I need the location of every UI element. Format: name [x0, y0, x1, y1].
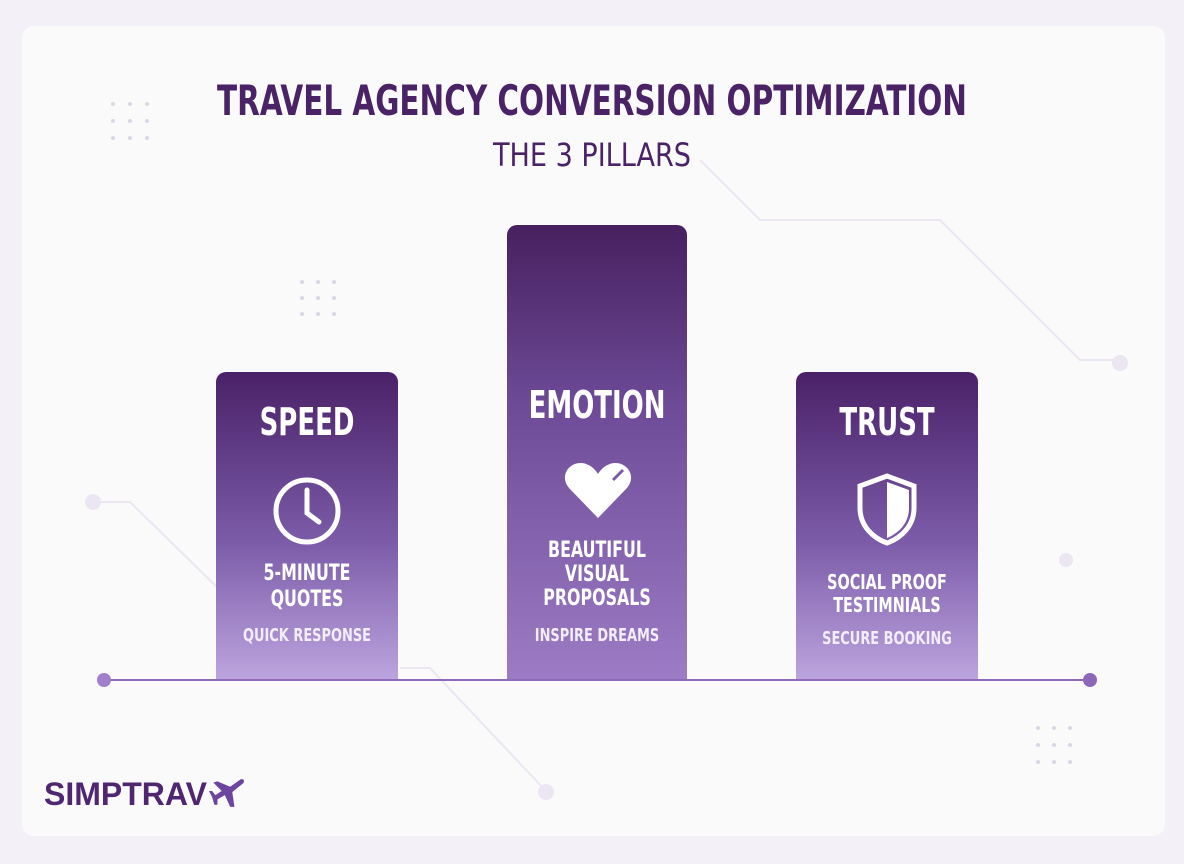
text: social proof testimnials: SOCIAL PROOF — [827, 570, 947, 594]
text: inspire dreams: INSPIRE DREAMS — [535, 625, 659, 646]
icon: clock — [274, 478, 340, 544]
panel: emotion — [507, 225, 687, 679]
heading: speed: SPEED — [260, 400, 354, 444]
text: quick response: QUICK RESPONSE — [243, 625, 371, 646]
text: 5-minute quotes: 5-MINUTE — [264, 561, 350, 586]
panel: trust — [796, 372, 978, 679]
text: 5-minute quotes — [264, 561, 350, 612]
text: 5-minute quotes: QUOTES — [271, 587, 343, 612]
heading: trust: TRUST — [839, 400, 935, 444]
baseline axis — [97, 673, 1097, 687]
text: secure booking: SECURE BOOKING — [822, 628, 952, 649]
text: beautiful visual proposals — [543, 538, 651, 611]
text: beautiful visual proposals: VISUAL — [565, 562, 629, 587]
icon: heart — [564, 463, 632, 518]
heading: emotion: EMOTION — [529, 383, 666, 427]
text: beautiful visual proposals: BEAUTIFUL — [548, 538, 646, 563]
icon: shield — [858, 473, 916, 546]
text: social proof testimnials — [827, 570, 947, 617]
subtitle: THE 3 PILLARS — [493, 136, 691, 174]
panel: speed — [216, 372, 398, 679]
text: beautiful visual proposals: PROPOSALS — [543, 586, 651, 611]
logo: simptrav: SIMPTRAV — [44, 776, 207, 812]
text: social proof testimnials: TESTIMNIALS — [833, 593, 941, 617]
title: TRAVEL AGENCY CONVERSION OPTIMIZATION — [217, 76, 967, 125]
